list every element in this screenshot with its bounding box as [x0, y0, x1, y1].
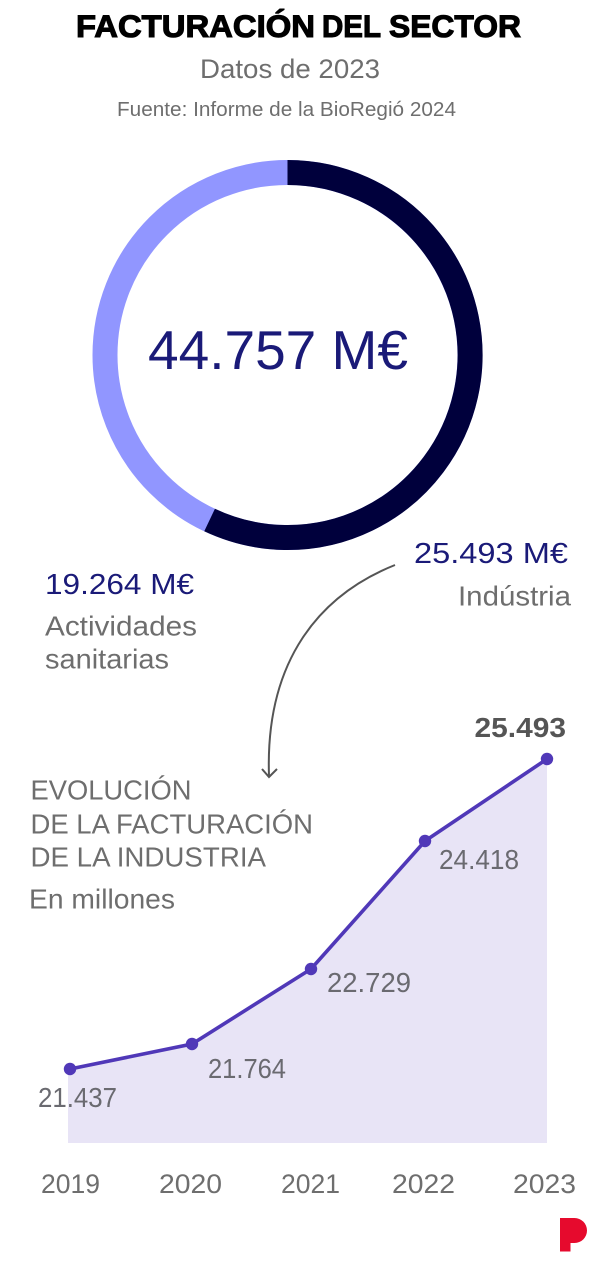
area chart heading: DE LA INDUSTRIA — [30, 842, 267, 872]
value labels: 21.764 — [208, 1053, 286, 1084]
title — [76, 8, 521, 44]
label: actividades sanitarias: sanitarias — [45, 644, 169, 674]
donut total: 44.757 M€ — [148, 319, 408, 381]
donut chart — [105, 172, 470, 537]
arrow — [262, 565, 395, 777]
x axis years: 2021 — [281, 1169, 340, 1199]
x axis years: 2020 — [159, 1169, 222, 1199]
value labels: 24.418 — [439, 844, 519, 875]
label: actividades sanitarias: 19.264 M€ — [45, 569, 194, 601]
area chart heading — [30, 774, 313, 872]
title: DEL — [322, 8, 381, 44]
chart subtitle: En millones — [29, 884, 175, 914]
data points — [64, 753, 553, 1075]
x axis years: 2023 — [513, 1169, 576, 1199]
x axis years: 2022 — [392, 1169, 455, 1199]
area chart heading: EVOLUCIÓN — [30, 774, 192, 806]
logo — [560, 1218, 587, 1252]
x axis years: 2019 — [41, 1169, 100, 1199]
value labels — [38, 712, 566, 1113]
x axis years — [41, 1169, 576, 1199]
value labels: 22.729 — [327, 967, 411, 998]
title: SECTOR — [389, 8, 521, 44]
subtitle: Datos de 2023 — [200, 54, 380, 84]
value labels: 21.437 — [38, 1082, 117, 1113]
area chart heading: DE LA FACTURACIÓN — [30, 808, 313, 840]
label: industria: 25.493 M€ — [414, 538, 568, 570]
title: FACTURACIÓN — [76, 8, 315, 44]
value labels: 25.493 — [474, 712, 566, 743]
label: industria: Indústria — [458, 580, 572, 612]
line — [70, 759, 547, 1069]
area fill — [68, 759, 547, 1143]
source note: Fuente: Informe de la BioRegió 2024 — [117, 99, 456, 121]
label: actividades sanitarias — [45, 569, 197, 674]
label: actividades sanitarias: Actividades — [45, 610, 197, 642]
area chart — [64, 753, 553, 1143]
label: industria — [414, 538, 572, 612]
